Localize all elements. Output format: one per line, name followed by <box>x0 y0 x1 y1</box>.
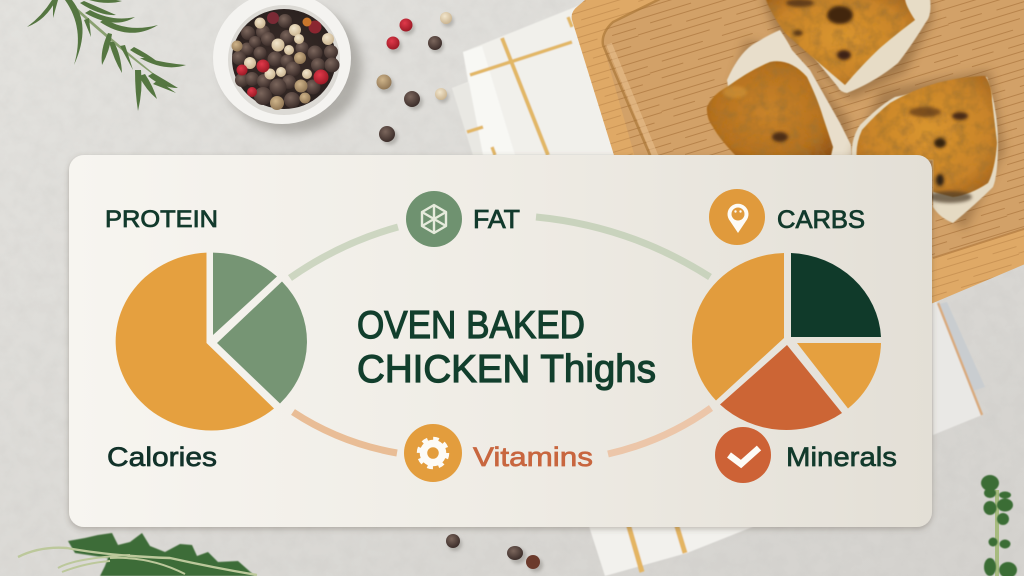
label: FAT: FAT <box>473 204 520 234</box>
cutting board <box>572 0 1024 400</box>
connector arc: top right <box>536 217 710 277</box>
chicken: left piece <box>707 30 852 160</box>
title: CHICKEN Thighs <box>357 348 656 391</box>
icon: carbs pin <box>709 189 765 245</box>
left pie chart <box>116 253 307 430</box>
connector arc: bottom left <box>293 412 397 453</box>
label: PROTEIN: PROTEIN <box>105 206 218 233</box>
main panel <box>69 155 932 527</box>
slice: red orange <box>720 345 842 430</box>
label: CARBS: CARBS <box>777 206 865 234</box>
label: Vitamins: Vitamins <box>473 442 593 472</box>
label: Minerals: Minerals <box>786 442 897 472</box>
slice: dark green <box>791 253 881 337</box>
slice: orange small <box>797 343 881 408</box>
towel: top left folded <box>452 5 620 155</box>
icon: minerals check <box>715 427 771 483</box>
peppercorns in bowl <box>232 12 340 110</box>
icon: fat <box>406 191 462 247</box>
title: OVEN BAKED <box>357 304 585 347</box>
towel: bottom <box>587 520 770 576</box>
chicken pieces <box>707 0 1005 230</box>
rosemary sprig <box>27 0 186 111</box>
label: Calories: Calories <box>107 442 217 472</box>
towel: right lower corner <box>932 300 985 435</box>
slice: green small <box>213 253 277 335</box>
slice: calories orange <box>116 253 274 430</box>
title <box>357 304 656 391</box>
right pie chart <box>692 253 881 430</box>
slice: green large <box>217 282 307 404</box>
connector arc: bottom right <box>608 408 711 454</box>
connector arc: top left <box>290 227 398 278</box>
chicken: right piece <box>850 70 1005 230</box>
loose peppercorns <box>376 12 543 572</box>
thyme sprig bottom left <box>18 533 257 576</box>
chicken: top piece <box>762 0 932 100</box>
slice: orange large <box>692 253 784 400</box>
icon: vitamins gear <box>404 424 462 482</box>
peppercorn bowl <box>213 0 362 133</box>
thyme sprig bottom right <box>981 475 1017 576</box>
